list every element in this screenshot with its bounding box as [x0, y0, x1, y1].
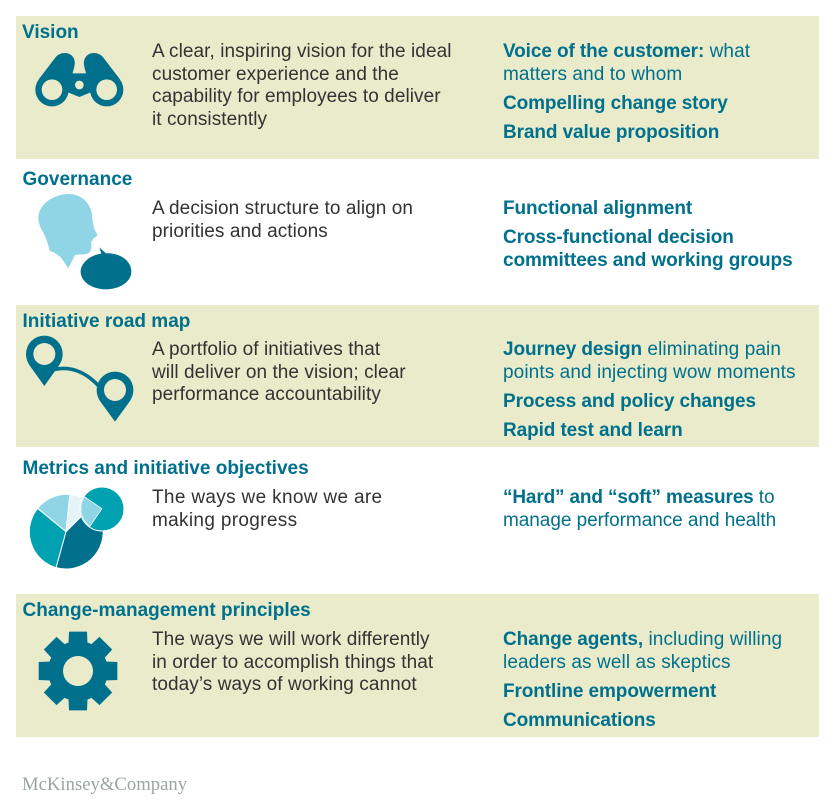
- icon: head with speech bubble: [38, 194, 132, 290]
- text: vision details: Voice of the customer: what: [503, 41, 750, 62]
- text: governance details: Cross-functional decision: [503, 227, 734, 248]
- text: governance details: Functional alignment: [503, 198, 692, 219]
- text: change-management details: Change agents, including willing: [503, 629, 782, 650]
- text: road map details: Rapid test and learn: [503, 420, 683, 441]
- text: change-management description: The ways we will work differently: [152, 629, 430, 650]
- text: metrics description: The ways we know we are: [152, 487, 382, 508]
- icon: binoculars: [35, 53, 124, 106]
- text: governance details: committees and working groups: [503, 250, 793, 271]
- text: vision description: it consistently: [152, 109, 267, 130]
- text: metrics description: making progress: [152, 510, 297, 531]
- panel: initiative road map background: [16, 305, 819, 447]
- text: change-management details: [503, 629, 782, 731]
- heading: Vision: Vision: [22, 22, 79, 43]
- text: vision details: Brand value proposition: [503, 122, 719, 143]
- text: governance description: [152, 198, 413, 242]
- text: change-management details: Communications: [503, 710, 656, 731]
- text: road map description: A portfolio of initiatives that: [152, 339, 380, 360]
- text: vision details: Compelling change story: [503, 93, 728, 114]
- text: road map details: Journey design eliminating pain: [503, 339, 781, 360]
- icon: pie chart: [30, 488, 124, 568]
- text: governance description: A decision structure to align on: [152, 198, 413, 219]
- text: metrics details: [503, 487, 776, 531]
- text: road map description: performance accountability: [152, 384, 381, 405]
- text: governance description: priorities and actions: [152, 221, 328, 242]
- text: vision description: [152, 41, 452, 130]
- text: vision description: capability for employees to deliver: [152, 86, 441, 107]
- icon: gear: [38, 632, 118, 710]
- text: change-management details: leaders as well as skeptics: [503, 652, 731, 673]
- text: vision details: [503, 41, 750, 143]
- panel: change-management background: [16, 594, 819, 737]
- text: road map description: [152, 339, 406, 405]
- text: road map details: [503, 339, 796, 441]
- text: change-management details: Frontline empowerment: [503, 681, 716, 702]
- text: change-management description: today’s ways of working cannot: [152, 674, 417, 695]
- text: change-management description: [152, 629, 433, 695]
- text: metrics details: manage performance and health: [503, 510, 776, 531]
- text: vision details: matters and to whom: [503, 64, 682, 85]
- text: vision description: customer experience and the: [152, 64, 399, 85]
- icon: map pins with route: [26, 336, 134, 422]
- panel: vision background: [16, 16, 819, 159]
- text: change-management description: in order to accomplish things that: [152, 652, 433, 673]
- text: vision description: A clear, inspiring vision for the ideal: [152, 41, 452, 62]
- text: road map details: points and injecting wow moments: [503, 362, 796, 383]
- footer: McKinsey&Company logo: McKinsey&Company: [22, 774, 187, 795]
- text: road map description: will deliver on the vision; clear: [152, 362, 406, 383]
- text: metrics description: [152, 487, 382, 531]
- text: metrics details: “Hard” and “soft” measures to: [503, 487, 775, 508]
- heading: Initiative road map: Initiative road map: [22, 311, 190, 332]
- heading: Metrics and initiative objectives: Metrics and initiative objectives: [22, 458, 309, 479]
- heading: Change-management principles: Change-management principles: [22, 600, 311, 621]
- text: governance details: [503, 198, 793, 271]
- text: road map details: Process and policy changes: [503, 391, 756, 412]
- heading: Governance: Governance: [22, 169, 132, 190]
